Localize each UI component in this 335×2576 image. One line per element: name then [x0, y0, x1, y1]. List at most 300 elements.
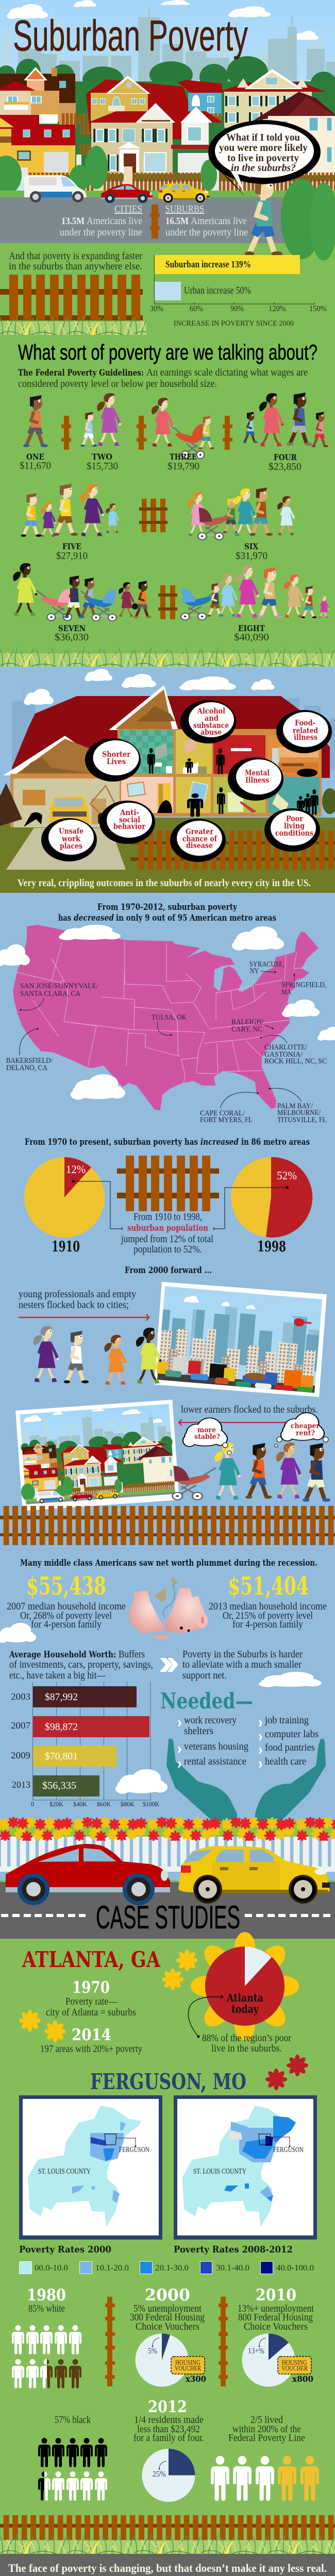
- bar chart: poverty increase since 2000: 60%: [190, 304, 203, 313]
- text: young professionals: nesters flocked back to cities;: [19, 1299, 129, 1311]
- outcome bubble: anti-social behavior: social: [119, 816, 140, 824]
- text: Atlanta 2014: 2014: [72, 2026, 111, 2044]
- flower pie: Atlanta today: Atlanta: [226, 1991, 263, 2004]
- road markings: [1, 1914, 330, 1917]
- column: 2010: 13%+ unemployment: [238, 2303, 314, 2314]
- outcome bubble: poor living conditions: living: [284, 822, 305, 831]
- list: services needed: rental assistance: [184, 1756, 246, 1767]
- city labels: PALM BAY/: [277, 1102, 313, 1110]
- text: metro decrease heading: in only 9 out of 95 American metro areas: [116, 913, 276, 923]
- vehicles: [156, 1355, 314, 1393]
- column: 57 percent black: [38, 2414, 107, 2501]
- voucher: x800: VOUCHER: [281, 2365, 308, 2372]
- city labels: MELBOURNE/: [277, 1109, 321, 1117]
- thought bubble: more stable: stable?: [194, 1433, 220, 1441]
- outcome bubble: unsafe work places: places: [60, 842, 82, 851]
- outcome bubble: alcohol and substance abuse: abuse: [200, 728, 222, 737]
- text: metro decrease heading: [58, 902, 276, 923]
- heading: Ferguson: FERGUSON, MO: [90, 2069, 246, 2094]
- speech bubble: What if I told you: [226, 132, 300, 143]
- center fence: [117, 1156, 219, 1211]
- bar chart: poverty increase since 2000: Suburban increase 139%: [165, 259, 251, 270]
- outcome bubble: unsafe work places: work: [61, 835, 81, 843]
- speech bubble: you were more likely: [219, 142, 308, 154]
- leader lines: [20, 971, 301, 1108]
- trees: [0, 783, 22, 826]
- bar chart: average household worth: $87,992: [45, 1691, 78, 1703]
- list: services needed: shelters: [184, 1725, 213, 1737]
- outcome bubble: mental illness: Mental: [245, 769, 270, 777]
- text: smaller support net: [182, 1649, 303, 1681]
- outcome bubble: alcohol and substance abuse: and: [205, 714, 219, 723]
- bar chart: poverty increase since 2000: 30%: [150, 304, 163, 313]
- bar chart: average household worth: $56,335: [42, 1780, 76, 1791]
- text: poverty expanding faster: And that poverty is expanding faster: [9, 250, 142, 262]
- panel: green household section background: [0, 243, 335, 667]
- text: metro decrease heading: decreased: [74, 913, 114, 923]
- stat: 2007 median income: [7, 1572, 126, 1630]
- household eight: [181, 565, 329, 643]
- text: metro increase heading: increased: [200, 1137, 239, 1147]
- house frame: [118, 729, 322, 817]
- stat: 2007 median income: 2007 median household income: [7, 1601, 126, 1612]
- bar chart: poverty increase since 2000: INCREASE IN POVERTY SINCE 2000: [174, 319, 294, 328]
- city labels: BAKERSFIELD/: [6, 1057, 53, 1065]
- suburbs column: [165, 204, 248, 238]
- column: 2010: Choice Vouchers: [244, 2321, 308, 2332]
- city labels: NY: [250, 967, 259, 975]
- sky: [0, 667, 335, 821]
- stat: 2013 median income: for 4-person family: [232, 1619, 303, 1630]
- household six: $31,970: [236, 550, 267, 562]
- voucher: x300: HOUSING: [175, 2359, 200, 2367]
- text: federal poverty guidelines: An earnings scale dictating what wages are: [146, 367, 308, 378]
- column: 2010: [238, 2286, 314, 2386]
- household five: FIVE: [62, 541, 81, 551]
- text: federal poverty guidelines: considered poverty level or below per household size.: [18, 378, 217, 389]
- map captions: Poverty Rates 2008-2012: [174, 2244, 293, 2255]
- driveway: [6, 828, 126, 870]
- household six: [188, 487, 295, 562]
- text: smaller support net: support net.: [182, 1670, 227, 1681]
- pictogram: 85 percent white: [12, 2325, 81, 2388]
- rooms: [120, 730, 320, 813]
- red car: [6, 1844, 170, 1905]
- map: poverty rates 2000: FERGUSON: [119, 2146, 149, 2154]
- household two: $15,730: [87, 461, 118, 472]
- outcome bubble: anti-social behavior: behavior: [113, 822, 145, 831]
- cities column: CITIES: [114, 204, 142, 215]
- household seven: $36,030: [55, 632, 89, 643]
- text: Atlanta 1970: [46, 1978, 136, 2018]
- household eight: $40,090: [234, 632, 269, 643]
- photo: city scene: [153, 1280, 328, 1398]
- map: poverty rates 2000: ST. LOUIS COUNTY: [38, 2167, 91, 2176]
- outcome bubble: food-related illness: related: [293, 726, 318, 735]
- helicopter: [291, 1316, 312, 1328]
- stat: 2007 median income: Or, 268% of poverty level: [20, 1610, 112, 1621]
- thought bubble: cheaper rent: cheaper: [291, 1422, 320, 1430]
- fence post: [137, 416, 146, 450]
- bar chart: average household worth: $40K: [73, 1800, 88, 1808]
- household seven: [13, 563, 152, 643]
- list: services needed: health care: [265, 1756, 306, 1767]
- bar chart: poverty increase since 2000: [150, 255, 327, 328]
- icon: broken piggy bank: [129, 1577, 208, 1640]
- connector lines: [72, 1180, 289, 1230]
- column: two fifths: within 200% of the: [232, 2424, 301, 2435]
- pie chart 1910: [24, 1157, 105, 1255]
- column: one quarter of residents: 1/4 residents made: [134, 2414, 204, 2426]
- beige towers: [158, 1325, 317, 1386]
- text: 88 percent: [202, 2032, 291, 2054]
- cloud: [0, 1623, 36, 1643]
- map legend: [20, 2262, 314, 2274]
- text: lower earners: lower earners flocked to the suburbs.: [181, 1404, 318, 1415]
- list: services needed: food pantries: [265, 1742, 315, 1753]
- city labels: ROCK HILL, NC, SC: [264, 1057, 327, 1065]
- text: average household worth: of investments, cars, property, savings,: [9, 1659, 153, 1670]
- household four: [243, 393, 328, 472]
- text: Atlanta 1970: city of Atlanta = suburbs: [46, 2007, 136, 2018]
- text: metro decrease heading: From 1970-2012, suburban poverty: [97, 902, 238, 912]
- pie: 13 percent unemployment: 13+%: [248, 2347, 264, 2355]
- outcome bubble: poor living conditions: conditions: [275, 829, 313, 838]
- city labels: CHARLOTTE/: [264, 1043, 308, 1052]
- long fence: [0, 1506, 335, 1545]
- bar chart: average household worth: 2003: [11, 1691, 30, 1702]
- outcome bubble: greater chance of disease: disease: [186, 841, 213, 850]
- left attic: [3, 736, 89, 775]
- cities column: under the poverty line: [60, 227, 142, 238]
- household one: ONE: [26, 452, 44, 462]
- outcome bubble: shorter lives: Lives: [107, 757, 126, 766]
- fence with grass: [0, 275, 146, 335]
- city labels: RALEIGH/: [231, 1018, 264, 1026]
- people walking to the city: [34, 1326, 162, 1385]
- US map: [0, 925, 335, 1124]
- decorative yellow flowers: [19, 1950, 198, 2042]
- grass line: [0, 1880, 335, 1882]
- column: 2000: Choice Vouchers: [136, 2321, 199, 2332]
- panel: house of outcomes: [0, 667, 335, 893]
- small fence: [139, 499, 167, 532]
- cities column: Americans live: [87, 215, 142, 227]
- bar chart: poverty increase since 2000: 150%: [309, 304, 327, 313]
- bar chart: average household worth: $98,872: [45, 1721, 78, 1733]
- map: poverty rates 2008-2012: FERGUSON: [273, 2146, 304, 2154]
- voucher: x800: HOUSING: [282, 2359, 307, 2367]
- attic gable center: [109, 685, 178, 730]
- outcome bubble: unsafe work places: [41, 818, 97, 861]
- bar chart: average household worth: $80K: [121, 1800, 135, 1808]
- list: services needed: work recovery: [184, 1715, 237, 1726]
- fence with grass: [0, 2515, 335, 2554]
- text: suburban population: population to 52%.: [133, 1244, 202, 1255]
- column: one quarter of residents: less than $23,492: [137, 2424, 200, 2435]
- outcome bubble: shorter lives: [85, 738, 141, 782]
- column: 2000: 5% unemployment: [133, 2303, 202, 2314]
- lawn: [0, 818, 335, 893]
- column: 2012 heading: 2012: [148, 2398, 187, 2416]
- stat: 2007 median income: for 4-person family: [31, 1619, 102, 1630]
- speech bubble: [208, 120, 321, 197]
- city labels: SAN JOSE/SUNNYVALE/: [20, 982, 99, 990]
- map clouds: [0, 925, 335, 1099]
- map: poverty rates 2000: [19, 2095, 162, 2240]
- city labels: SYRACUSE,: [249, 960, 284, 969]
- text: poverty expanding faster: [9, 250, 142, 272]
- post divider: [219, 2297, 228, 2386]
- column: 57 percent black: 57% black: [55, 2414, 91, 2426]
- list: services needed: [178, 1715, 319, 1768]
- household four: FOUR: [274, 452, 297, 462]
- bar chart: average household worth: $20K: [49, 1800, 64, 1808]
- post divider: [105, 2297, 115, 2386]
- text: 88 percent: 88% of the region’s poor: [202, 2032, 291, 2044]
- voucher: x800: x800: [292, 2374, 313, 2384]
- text: average household worth: etc., have taken a big hit—: [9, 1670, 106, 1681]
- thought bubble: more stable: [183, 1418, 231, 1455]
- suburbs column: 16.5M: [165, 216, 189, 227]
- household five: $27,910: [56, 550, 88, 562]
- household one: $11,670: [20, 460, 51, 471]
- grass strip: [0, 645, 335, 667]
- household seven: SEVEN: [58, 623, 86, 633]
- text: Atlanta 2014: 197 areas with 20%+ poverty: [40, 2043, 142, 2055]
- column: one quarter of residents: [133, 2414, 204, 2502]
- household three: [152, 398, 214, 472]
- divider post: [150, 205, 160, 239]
- bar chart: average household worth: [11, 1682, 160, 1808]
- list: services needed: veterans housing: [184, 1741, 248, 1752]
- flower pie: Atlanta today: [191, 1932, 299, 2040]
- map legend: 20.1-30.0: [155, 2263, 189, 2273]
- fence post: [223, 416, 232, 450]
- pie chart 1998: [231, 1157, 312, 1255]
- panel: green case study background: [0, 1939, 335, 2554]
- column: 2000: [130, 2286, 206, 2386]
- text: federal poverty guidelines: [18, 367, 308, 389]
- stat: 2013 median income: [209, 1572, 327, 1630]
- city labels: GASTONIA/: [264, 1050, 303, 1059]
- distant skyline: [12, 688, 335, 778]
- column: two fifths: [211, 2414, 319, 2501]
- voucher: x800: [278, 2357, 313, 2384]
- walking man with bushes: [245, 177, 335, 261]
- heading: Atlanta: ATLANTA, GA: [22, 1947, 161, 1972]
- column: two fifths: Federal Poverty Line: [228, 2432, 305, 2444]
- map captions: [19, 2244, 293, 2255]
- cloud: [115, 1769, 167, 1794]
- heading: needed: Needed—: [160, 1688, 253, 1714]
- household five: [21, 484, 120, 562]
- cities column: [60, 204, 142, 238]
- suburbs column: under the poverty line: [165, 227, 248, 238]
- city labels: [6, 960, 327, 1124]
- text: metro increase heading: From 1970 to present, suburban poverty has: [25, 1137, 198, 1147]
- text: suburban population: suburban population: [127, 1223, 208, 1233]
- bar chart: average household worth: 2009: [11, 1750, 30, 1760]
- pie: 5 percent unemployment: [135, 2334, 189, 2386]
- thought bubble: more stable: more: [197, 1426, 216, 1434]
- bar chart: average household worth: 2013: [12, 1780, 30, 1790]
- outcome bubble: greater chance of disease: chance of: [182, 835, 218, 843]
- arrow to suburbs: [179, 1419, 289, 1426]
- household six: SIX: [244, 541, 259, 551]
- suburbs column: Americans live: [191, 215, 247, 227]
- list: services needed: computer labs: [265, 1728, 319, 1740]
- map: poverty rates 2008-2012: [174, 2095, 317, 2240]
- column: 2010: 800 Federal Housing: [238, 2312, 313, 2323]
- outcome bubble: mental illness: [228, 757, 283, 801]
- text: Atlanta 1970: Poverty rate—: [65, 1996, 118, 2007]
- column: 2000: 2000: [145, 2286, 190, 2304]
- city labels: CAPE CORAL/: [200, 1109, 245, 1117]
- column: one quarter of residents: 25%: [153, 2470, 166, 2479]
- pie chart 1910: 1910: [52, 1238, 80, 1255]
- text: 88 percent: live in the suburbs.: [211, 2043, 282, 2054]
- outcome bubble: shorter lives: Shorter: [102, 750, 130, 759]
- people walking to the suburbs: [173, 1443, 330, 1502]
- flower pie: Atlanta today: today: [231, 2003, 259, 2015]
- city labels: FORT MYERS, FL: [200, 1116, 253, 1124]
- column: 2000: 300 Federal Housing: [130, 2312, 205, 2323]
- column: 1980: 85% white: [28, 2303, 65, 2314]
- bar chart: poverty increase since 2000: 90%: [230, 304, 244, 313]
- pie chart 1998: 52%: [277, 1169, 297, 1182]
- text: metro decrease heading: has: [58, 913, 71, 923]
- small fence: [158, 585, 177, 619]
- household three: $19,790: [167, 461, 199, 472]
- yellow car in garage: [49, 796, 105, 824]
- fence: [130, 831, 335, 870]
- bar chart: average household worth: $100K: [143, 1800, 160, 1808]
- outcome bubble: alcohol and substance abuse: [180, 700, 236, 743]
- household eight: EIGHT: [238, 623, 265, 633]
- map: poverty rates 2008-2012: ST. LOUIS COUNTY: [193, 2167, 246, 2176]
- outcome bubble: greater chance of disease: [170, 819, 226, 862]
- thought bubble: cheaper rent: [275, 1413, 328, 1447]
- speech bubble: in the suburbs?: [231, 162, 296, 174]
- outcome bubble: alcohol and substance abuse: Alcohol: [197, 707, 225, 716]
- fence post: [61, 416, 71, 450]
- text: average household worth: [9, 1649, 153, 1681]
- clouds: [24, 669, 275, 705]
- pie: 5 percent unemployment: 5%: [148, 2347, 157, 2355]
- pie chart 1910: 12%: [66, 1163, 86, 1176]
- outcome bubble: anti-social behavior: Anti-: [120, 808, 139, 817]
- icon: cupped hands: [166, 1738, 326, 1822]
- text: Atlanta 2014: [40, 2026, 142, 2055]
- panel: cities vs suburbs stats: [60, 204, 248, 239]
- map legend: 40.0-100.0: [276, 2263, 314, 2273]
- stat: 2007 median income: $55,438: [26, 1572, 106, 1601]
- outcome bubble: alcohol and substance abuse: substance: [193, 721, 229, 730]
- voucher: x300: x300: [186, 2374, 206, 2384]
- city labels: MA: [281, 988, 291, 996]
- text: young professionals: [19, 1289, 136, 1311]
- suburbs column: SUBURBS: [165, 204, 204, 215]
- text: metro increase heading: in 86 metro areas: [241, 1137, 310, 1147]
- column: one quarter of residents: for a family of four.: [133, 2432, 204, 2444]
- panel: hero street scene: [0, 0, 335, 243]
- map legend: 10.1-20.0: [95, 2263, 129, 2273]
- outcome bubble: unsafe work places: Unsafe: [59, 827, 83, 836]
- text: average household worth: Buffers: [119, 1649, 145, 1660]
- arrow to city: [19, 1314, 149, 1320]
- outcome bubble: greater chance of disease: Greater: [186, 827, 213, 836]
- text: suburban population: From 1910 to 1998,: [133, 1211, 202, 1223]
- thought bubble: cheaper rent: rent?: [296, 1429, 315, 1437]
- outcome bubble: mental illness: Illness: [245, 776, 269, 785]
- household one: [20, 395, 51, 471]
- text: federal poverty guidelines: The Federal Poverty Guidelines:: [18, 368, 144, 378]
- road: [0, 197, 335, 243]
- bar chart: average household worth: $70,801: [45, 1751, 78, 1762]
- city labels: CARY, NC: [231, 1025, 262, 1033]
- text: poverty expanding faster: in the suburbs than anywhere else.: [9, 261, 142, 272]
- stat: 2013 median income: Or, 215% of poverty level: [223, 1610, 313, 1621]
- white picket fence: [0, 1837, 335, 1872]
- outcome bubble: anti-social behavior: [99, 801, 155, 844]
- household two: TWO: [92, 452, 112, 462]
- column: 2010: 2010: [256, 2286, 296, 2304]
- speech bubble: to live in poverty: [227, 152, 299, 164]
- photo: suburb scene: [15, 1400, 179, 1511]
- map legend: 00.0-10.0: [35, 2263, 68, 2273]
- bar chart: poverty increase since 2000: 120%: [269, 304, 286, 313]
- map captions: Poverty Rates 2000: [19, 2244, 111, 2255]
- list: services needed: job training: [264, 1715, 309, 1726]
- household three: THREE: [170, 452, 197, 462]
- column: 1980: 1980: [27, 2286, 66, 2304]
- bar chart: average household worth: 2007: [11, 1720, 30, 1731]
- silhouettes of people: [24, 748, 319, 827]
- panel: blue middle section background: [0, 893, 335, 1882]
- pie chart 1998: 1998: [257, 1238, 286, 1255]
- decorative red flowers: [265, 2055, 308, 2090]
- heading: case studies: CASE STUDIES: [96, 1900, 240, 1936]
- outcome bubble: poor living conditions: Poor: [286, 815, 303, 823]
- text: smaller support net: to alleviate with a much smaller: [182, 1659, 301, 1670]
- bar chart: average household worth: 0: [31, 1800, 34, 1808]
- household two: [81, 393, 121, 472]
- road: closing: [0, 2554, 335, 2576]
- text: smaller support net: Poverty in the Suburbs is harder: [182, 1649, 303, 1660]
- text: young professionals: young professionals and empty: [19, 1289, 136, 1300]
- outcome bubble: food-related illness: [276, 710, 332, 753]
- city labels: TITUSVILLE, FL: [277, 1116, 327, 1124]
- text: suburban population: [121, 1211, 213, 1255]
- bar chart: average household worth: $60K: [97, 1800, 111, 1808]
- city labels: SANTA CLARA, CA: [20, 990, 80, 998]
- icon: chevrons: [160, 1658, 178, 1672]
- text: from 2000 forward: From 2000 forward ...: [125, 1265, 212, 1276]
- bar chart: poverty increase since 2000: Urban increase 50%: [184, 285, 251, 296]
- text: Atlanta 1970: 1970: [72, 1978, 110, 1997]
- arrow: Atlanta callout: [188, 1995, 223, 2038]
- garage: [10, 774, 120, 827]
- yellow car: [178, 1846, 330, 1904]
- roof: [12, 696, 330, 778]
- text: average household worth: Average Household Worth:: [9, 1650, 116, 1660]
- city labels: DELANO, CA: [6, 1064, 47, 1072]
- cars over road: [30, 183, 209, 203]
- city labels: SPRINGFIELD,: [281, 981, 326, 989]
- voucher: x300: VOUCHER: [175, 2365, 201, 2372]
- city labels: TULSA, OK: [152, 1013, 187, 1022]
